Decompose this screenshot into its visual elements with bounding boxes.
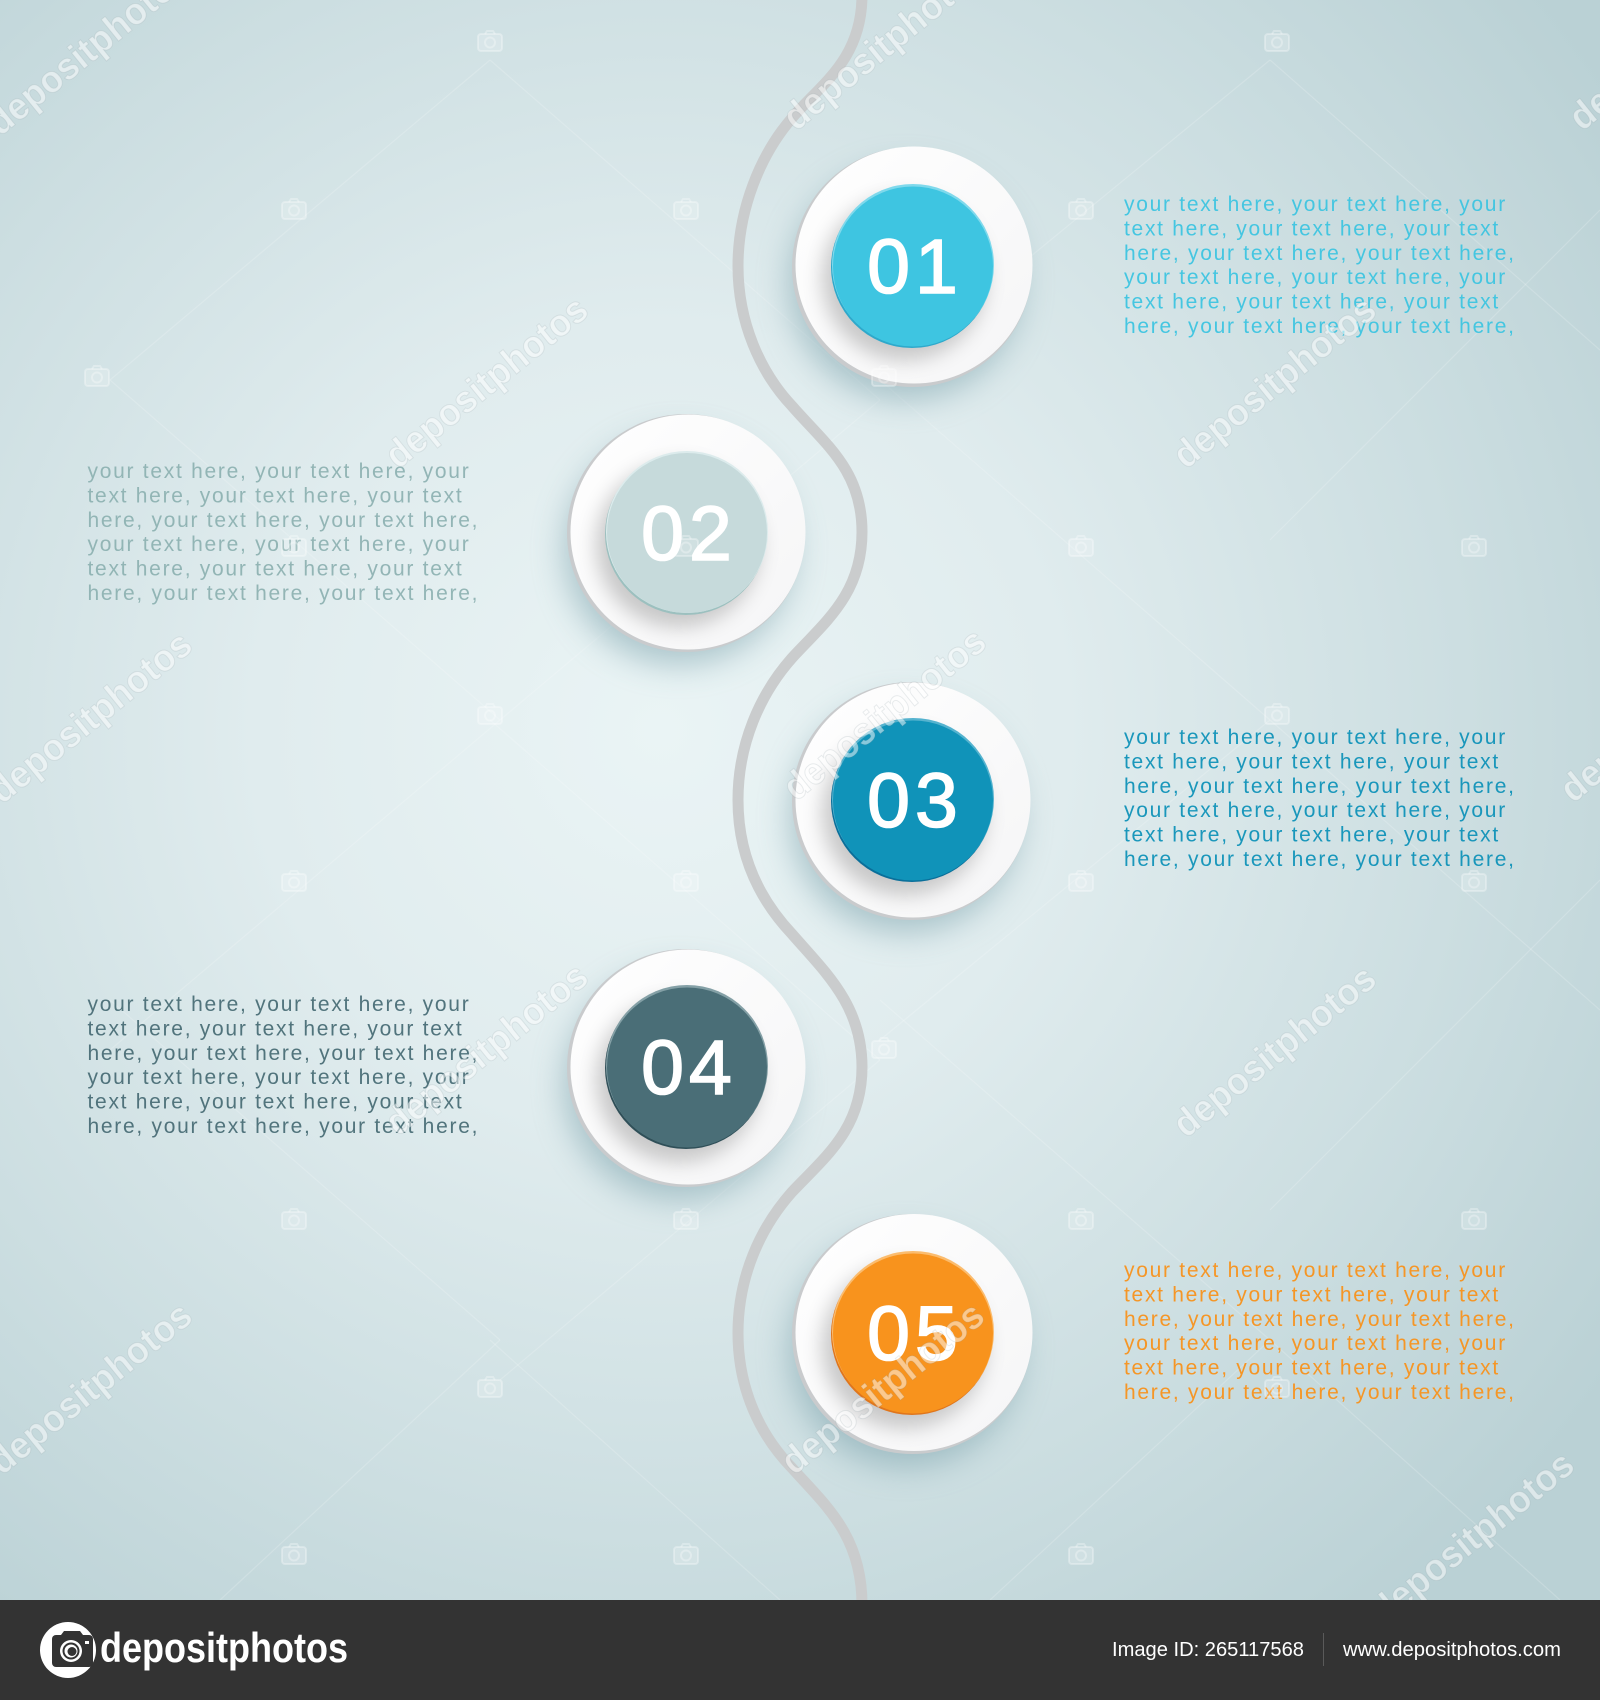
text block 02: here, your text here, your text here, — [88, 509, 479, 532]
outer disc rim 01 — [792, 147, 1032, 387]
text block 04: text here, your text here, your text — [88, 1017, 463, 1040]
outer disc rim 05 — [792, 1214, 1032, 1454]
watermark text: depositphotos — [775, 620, 994, 809]
step 01 — [789, 146, 1032, 400]
text block 05: your text here, your text here, your — [1124, 1259, 1507, 1282]
disc shadow 03 — [790, 703, 1020, 933]
outer disc rim 04 — [567, 949, 805, 1187]
text block 02: here, your text here, your text here, — [88, 582, 479, 605]
text block 01: your text here, your text here, your — [1124, 266, 1507, 289]
text block 03: text here, your text here, your text — [1124, 750, 1500, 773]
text block 05: here, your text here, your text here, — [1124, 1308, 1516, 1331]
text block 04: here, your text here, your text here, — [88, 1042, 479, 1065]
disc shadow 04 — [564, 970, 794, 1200]
inner disc highlight 03 — [832, 718, 994, 880]
footer bar — [0, 1600, 1600, 1700]
outer white disc 04 — [570, 950, 806, 1184]
inner disc face 05 — [833, 1254, 993, 1414]
inner disc face 01 — [833, 186, 993, 346]
text block 02 — [88, 460, 479, 605]
text block 03 — [1124, 726, 1516, 871]
watermark text: depositphotos — [773, 1294, 992, 1483]
inner disc edge 01 — [831, 186, 993, 348]
inner disc edge 04 — [605, 987, 767, 1149]
watermark text: depositphotos — [377, 288, 596, 477]
watermark text: depositphotos — [1165, 288, 1384, 477]
watermark camera icons — [85, 31, 1486, 1564]
outer disc rim 02 — [567, 414, 805, 652]
inner disc highlight 04 — [606, 985, 768, 1147]
inner disc highlight 05 — [832, 1251, 994, 1413]
inner disc face 02 — [607, 453, 767, 613]
number 03: 03 — [867, 758, 963, 844]
number 01: 01 — [867, 224, 963, 310]
watermark text: depositphotos — [1363, 1443, 1582, 1632]
inner disc edge 03 — [831, 720, 993, 882]
text block 01: your text here, your text here, your — [1124, 193, 1507, 216]
text block 05: text here, your text here, your text — [1124, 1357, 1500, 1380]
text block 02: your text here, your text here, your — [88, 460, 470, 483]
number 05: 05 — [867, 1291, 963, 1377]
text block 04: text here, your text here, your text — [88, 1091, 463, 1114]
inner disc shadow 03 — [822, 731, 986, 895]
outer white disc 03 — [796, 682, 1030, 918]
inner disc highlight 01 — [832, 184, 994, 346]
step 04 — [564, 949, 806, 1200]
text block 03: here, your text here, your text here, — [1124, 848, 1516, 871]
step 02 — [564, 414, 806, 665]
watermark text: depositphotos — [377, 955, 596, 1144]
text block 05: your text here, your text here, your — [1124, 1332, 1507, 1355]
footer website url: www.depositphotos.com — [1342, 1639, 1561, 1661]
number 04: 04 — [641, 1025, 737, 1111]
watermark text: depositphotos — [1165, 957, 1384, 1146]
text block 04: here, your text here, your text here, — [88, 1115, 479, 1138]
text block 02: your text here, your text here, your — [88, 533, 470, 556]
disc shadow 01 — [789, 168, 1021, 400]
text block 03: your text here, your text here, your — [1124, 799, 1507, 822]
text block 05: here, your text here, your text here, — [1124, 1381, 1516, 1404]
inner disc edge 02 — [605, 453, 767, 615]
text block 02: text here, your text here, your text — [88, 484, 463, 507]
text block 03: here, your text here, your text here, — [1124, 775, 1516, 798]
outer white disc 02 — [570, 414, 806, 650]
text block 01: text here, your text here, your text — [1124, 217, 1500, 240]
text block 05 — [1124, 1259, 1516, 1404]
outer disc rim 03 — [792, 682, 1030, 920]
step 03 — [790, 682, 1030, 933]
text block 05: text here, your text here, your text — [1124, 1283, 1500, 1306]
inner disc shadow 02 — [596, 463, 760, 627]
text block 03: your text here, your text here, your — [1124, 726, 1507, 749]
text block 01: text here, your text here, your text — [1124, 291, 1500, 314]
footer divider — [1323, 1633, 1324, 1666]
inner disc shadow 04 — [596, 998, 760, 1162]
text block 03: text here, your text here, your text — [1124, 824, 1500, 847]
inner disc highlight 02 — [606, 451, 768, 613]
disc shadow 02 — [564, 435, 794, 665]
footer image id: Image ID: 265117568 — [1112, 1639, 1304, 1661]
inner disc face 03 — [833, 720, 993, 880]
text block 02: text here, your text here, your text — [88, 558, 463, 581]
inner disc edge 05 — [831, 1253, 993, 1415]
footer logo wordmark: depositphotos — [100, 1624, 348, 1671]
inner disc face 04 — [607, 988, 767, 1148]
number 02: 02 — [641, 491, 737, 577]
text block 01 — [1124, 193, 1516, 338]
text block 01: here, your text here, your text here, — [1124, 242, 1516, 265]
disc shadow 05 — [789, 1235, 1021, 1467]
winding connector line — [738, 0, 862, 1605]
inner disc shadow 05 — [822, 1264, 986, 1428]
inner disc shadow 01 — [822, 196, 986, 360]
step 05 — [789, 1214, 1032, 1467]
outer white disc 05 — [796, 1214, 1032, 1451]
text block 01: here, your text here, your text here, — [1124, 315, 1516, 338]
outer white disc 01 — [796, 146, 1032, 384]
text block 04 — [88, 993, 479, 1138]
icon: footer camera logo — [40, 1622, 96, 1678]
text block 04: your text here, your text here, your — [88, 993, 470, 1016]
text block 04: your text here, your text here, your — [88, 1066, 470, 1089]
